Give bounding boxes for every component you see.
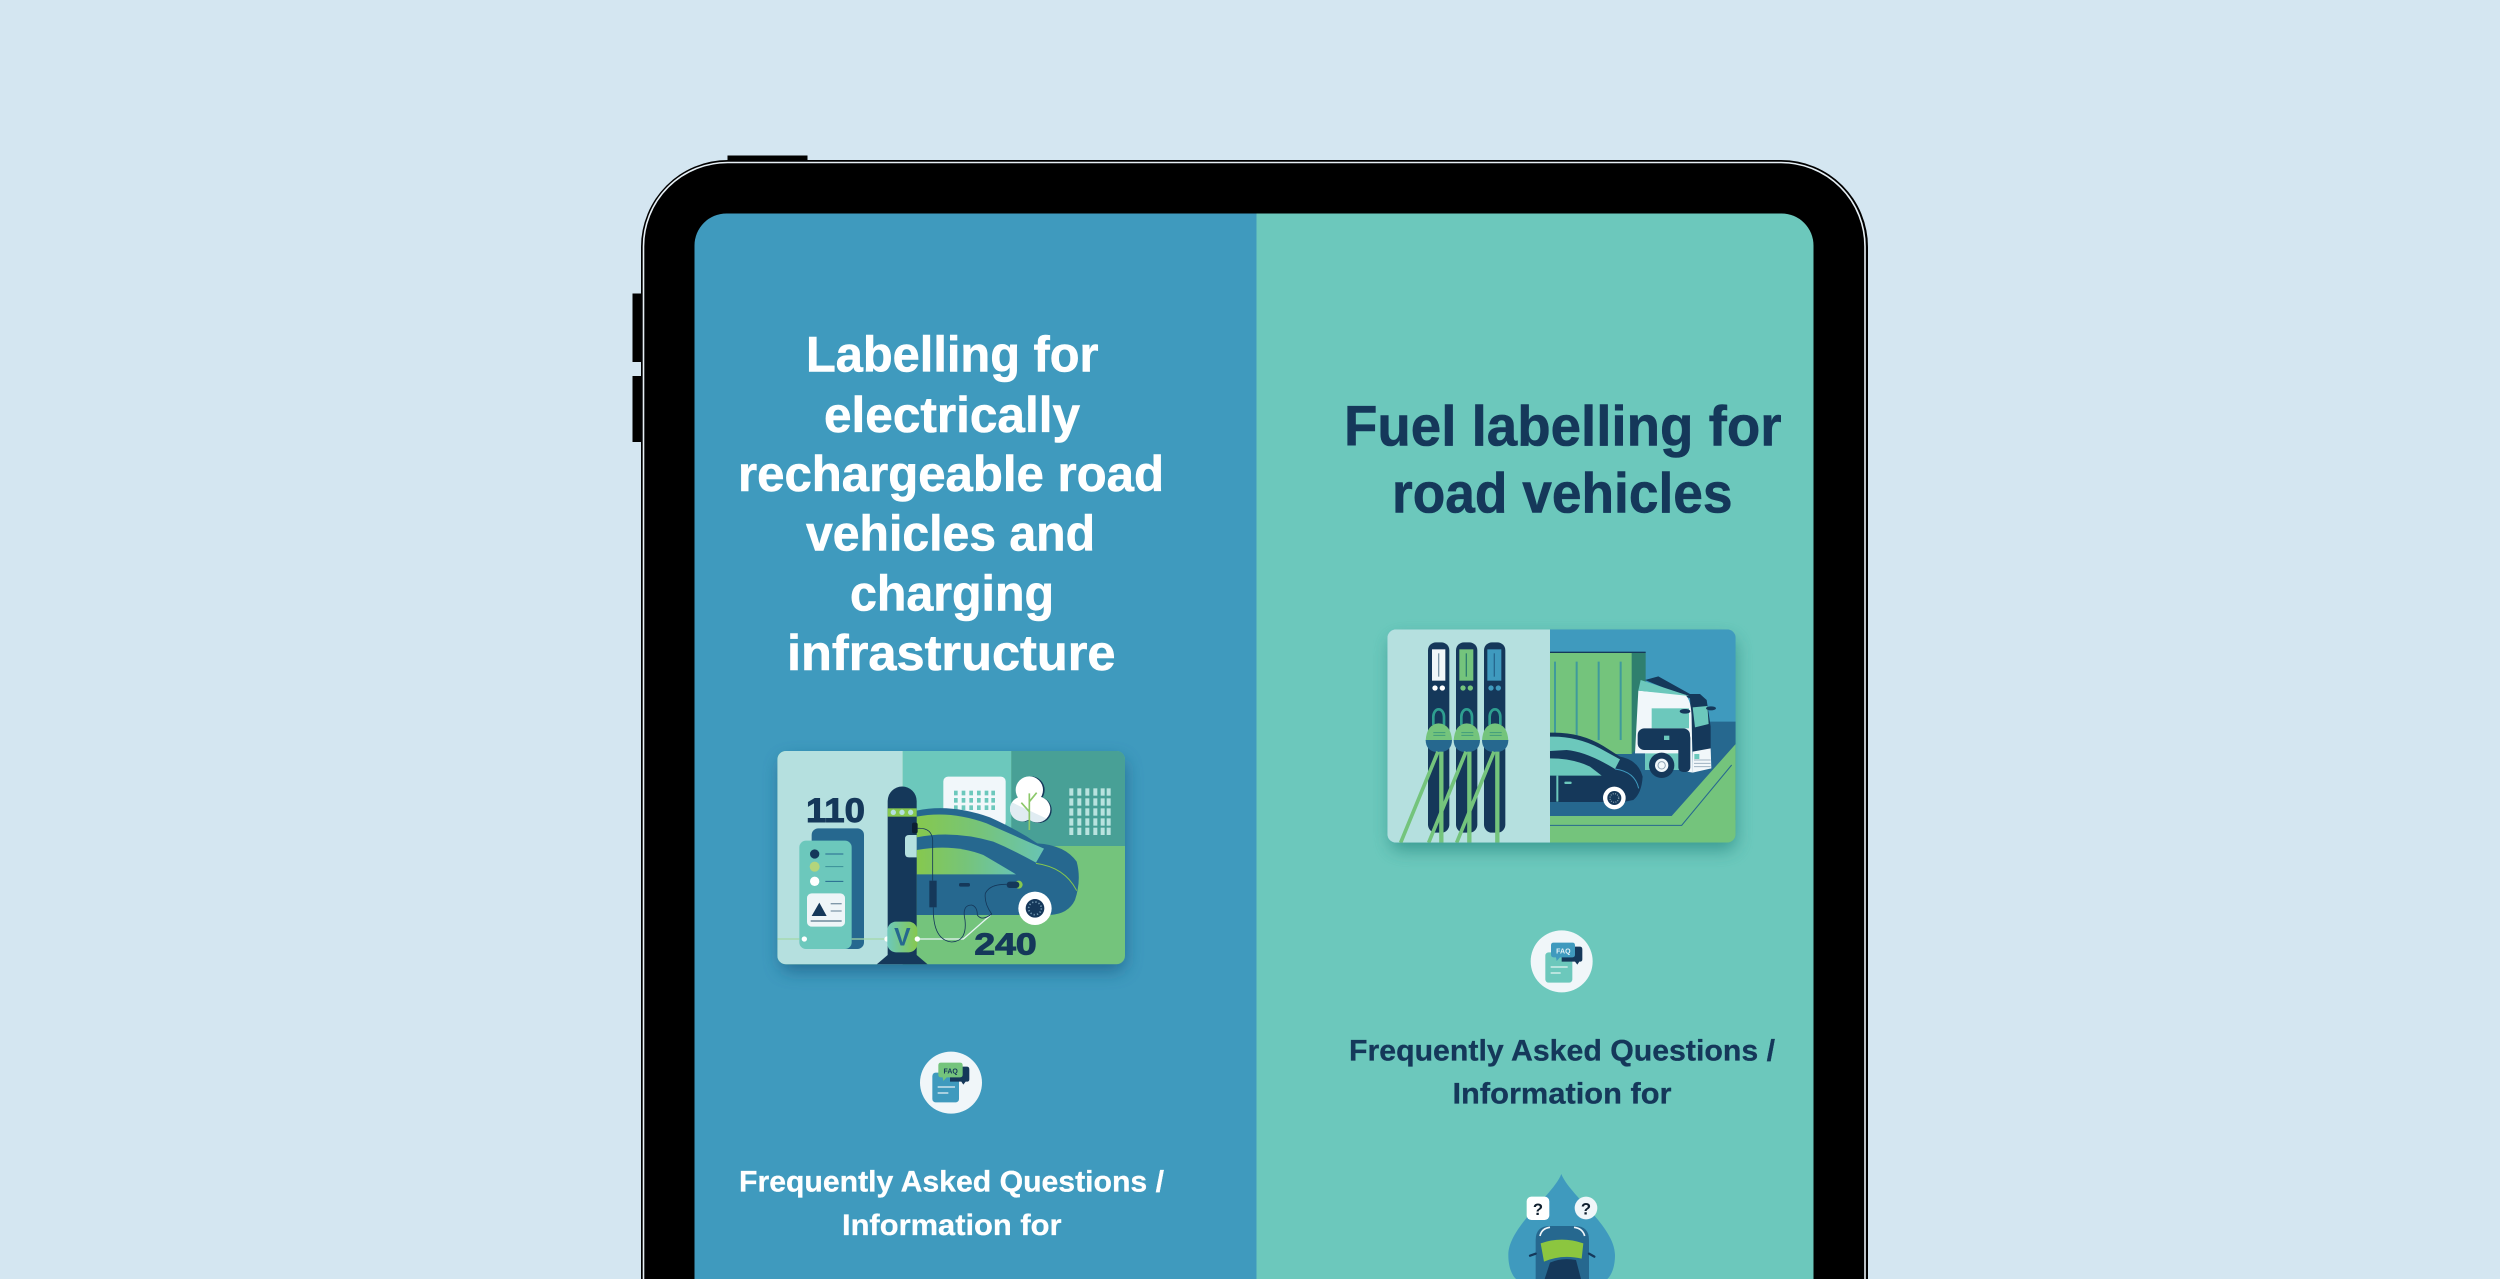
building (943, 777, 1006, 827)
heading: electric vehicle labelling: electrically (824, 387, 1080, 443)
tablet screen (694, 214, 1814, 1279)
FAQ text, electric column: Information for (842, 1209, 1062, 1242)
heading: electric vehicle labelling: infrastructure (787, 625, 1116, 681)
V badge (887, 922, 917, 952)
label: 110: 110 (806, 792, 865, 830)
icon: FAQ, fuel column: FAQ (1556, 948, 1571, 955)
heading: fuel labelling: Fuel labelling for (1344, 394, 1782, 458)
connector line (777, 936, 890, 942)
pump 1 (1426, 642, 1452, 833)
icon: FAQ, fuel column (1531, 930, 1593, 992)
heading: electric vehicle labelling: charging (850, 566, 1054, 622)
road (1550, 722, 1736, 820)
FAQ text, electric column: Frequently Asked Questions / (739, 1166, 1165, 1198)
heading: fuel labelling: road vehicles (1392, 462, 1732, 526)
truck (1550, 652, 1716, 778)
panel: electric vehicles (694, 214, 1257, 1279)
FAQ text, fuel column: Frequently Asked Questions / (1349, 1034, 1776, 1068)
charging post (877, 786, 928, 964)
icon: fuel drop with car and question marks (1508, 1174, 1615, 1279)
charging cable (917, 828, 1007, 942)
icon: FAQ, electric column (920, 1052, 982, 1114)
white charge line (917, 915, 991, 939)
illustration: fuel pumps and vehicles card (1387, 629, 1736, 850)
heading: electric vehicle labelling: vehicles and (806, 506, 1095, 562)
fuel hoses (1401, 752, 1497, 843)
tablet device frame (632, 156, 1868, 1279)
FAQ text, electric column (739, 1166, 1165, 1242)
panel: fuel labelling (1256, 214, 1814, 1279)
label: 240: 240 (974, 928, 1037, 962)
document label (799, 828, 864, 949)
heading: fuel labelling (1344, 394, 1782, 526)
pump 3 (1482, 642, 1508, 833)
pump 2 (1454, 642, 1480, 833)
question bubble left: ? (1533, 1200, 1543, 1219)
icon: FAQ, electric column: FAQ (943, 1068, 958, 1075)
car (917, 808, 1079, 925)
car (1550, 733, 1643, 809)
tree (1010, 776, 1052, 830)
V badge: V (894, 924, 911, 951)
heading: electric vehicle labelling (738, 326, 1164, 681)
wheel (1018, 892, 1052, 925)
heading: electric vehicle labelling: Labelling for (806, 326, 1098, 382)
heading: electric vehicle labelling: rechargeable road (738, 446, 1164, 502)
question bubble right: ? (1581, 1199, 1591, 1218)
FAQ text, fuel column: Information for (1452, 1078, 1672, 1110)
window grid (1069, 788, 1111, 835)
illustration: electric charging card (777, 751, 1125, 971)
FAQ text, fuel column (1349, 1034, 1776, 1110)
